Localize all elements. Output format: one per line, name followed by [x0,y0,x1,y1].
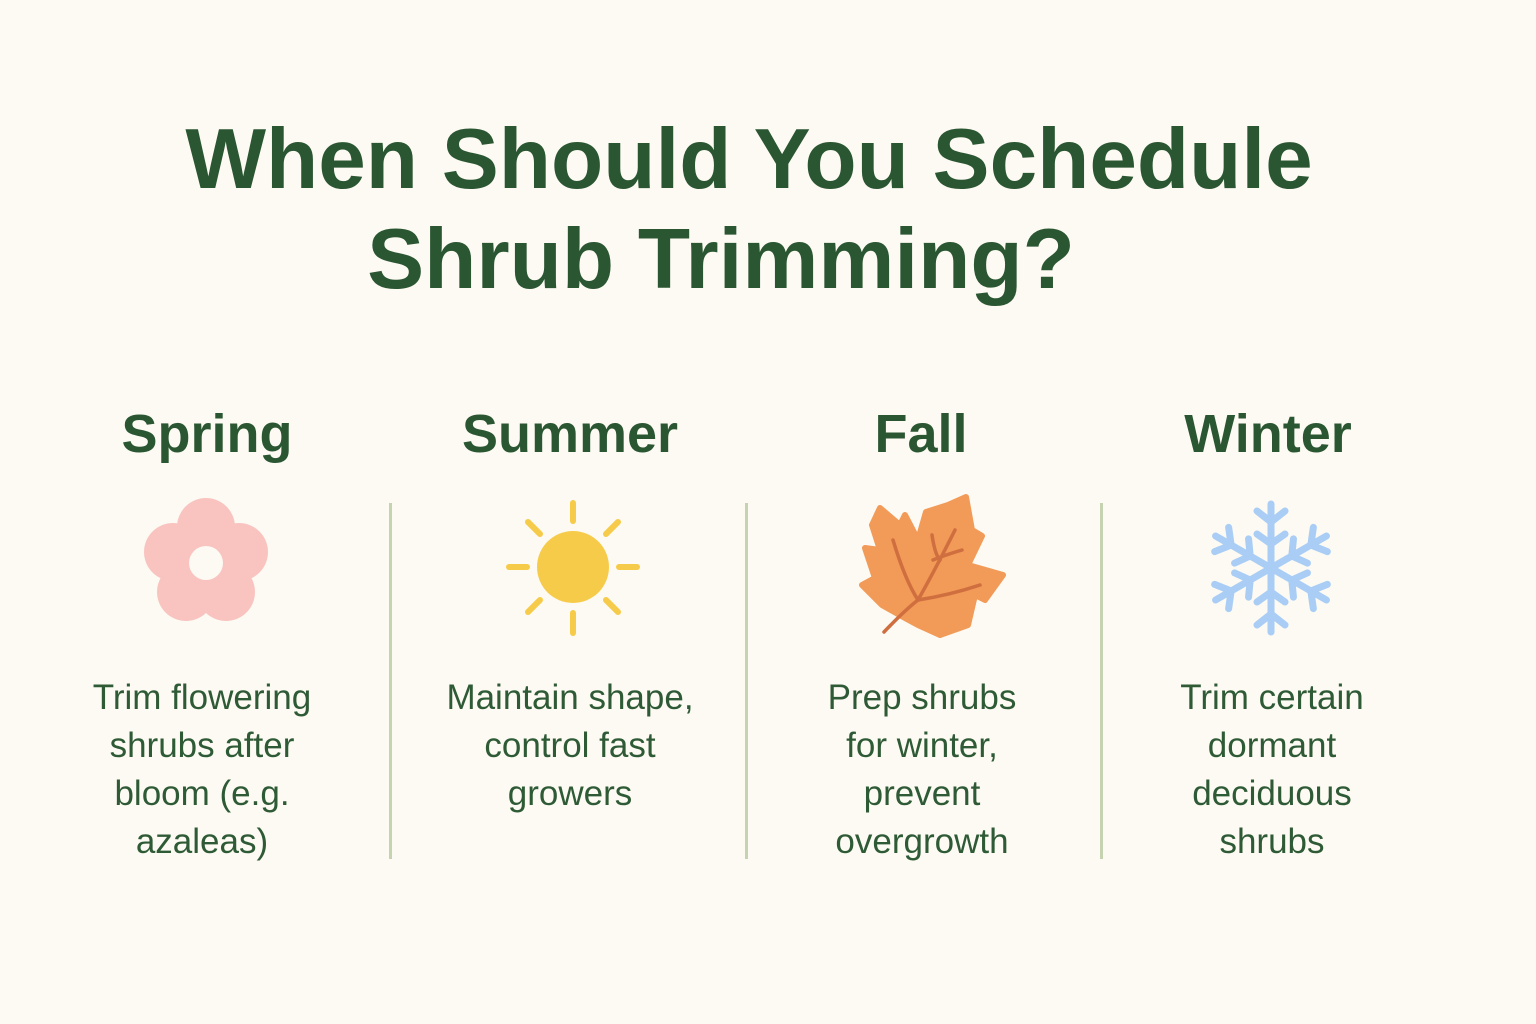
text: spring [93,678,311,861]
heading: winter: Winter [1184,404,1352,464]
text: spring: bloom (e.g. [114,774,290,813]
text: spring: azaleas) [136,822,268,861]
title [185,112,1313,307]
title: Shrub Trimming? [367,212,1075,307]
text: winter [1180,678,1364,861]
text: spring: Trim flowering [93,678,311,717]
text: summer [446,678,694,813]
heading: fall: Fall [874,404,968,464]
text: fall: for winter, [846,726,998,765]
text: winter: Trim certain [1180,678,1364,717]
text: fall: Prep shrubs [828,678,1016,717]
text: summer: growers [508,774,632,813]
text: winter: deciduous [1192,774,1352,813]
text: summer: control fast [484,726,656,765]
text: summer: Maintain shape, [446,678,694,717]
text: fall: prevent [864,774,980,813]
heading: spring: Spring [122,404,292,464]
text: winter: shrubs [1219,822,1325,861]
text: spring: shrubs after [110,726,294,765]
heading: summer: Summer [462,404,678,464]
text: winter: dormant [1208,726,1336,765]
title: When Should You Schedule [185,112,1313,207]
text: fall [828,678,1016,861]
text: fall: overgrowth [835,822,1009,861]
